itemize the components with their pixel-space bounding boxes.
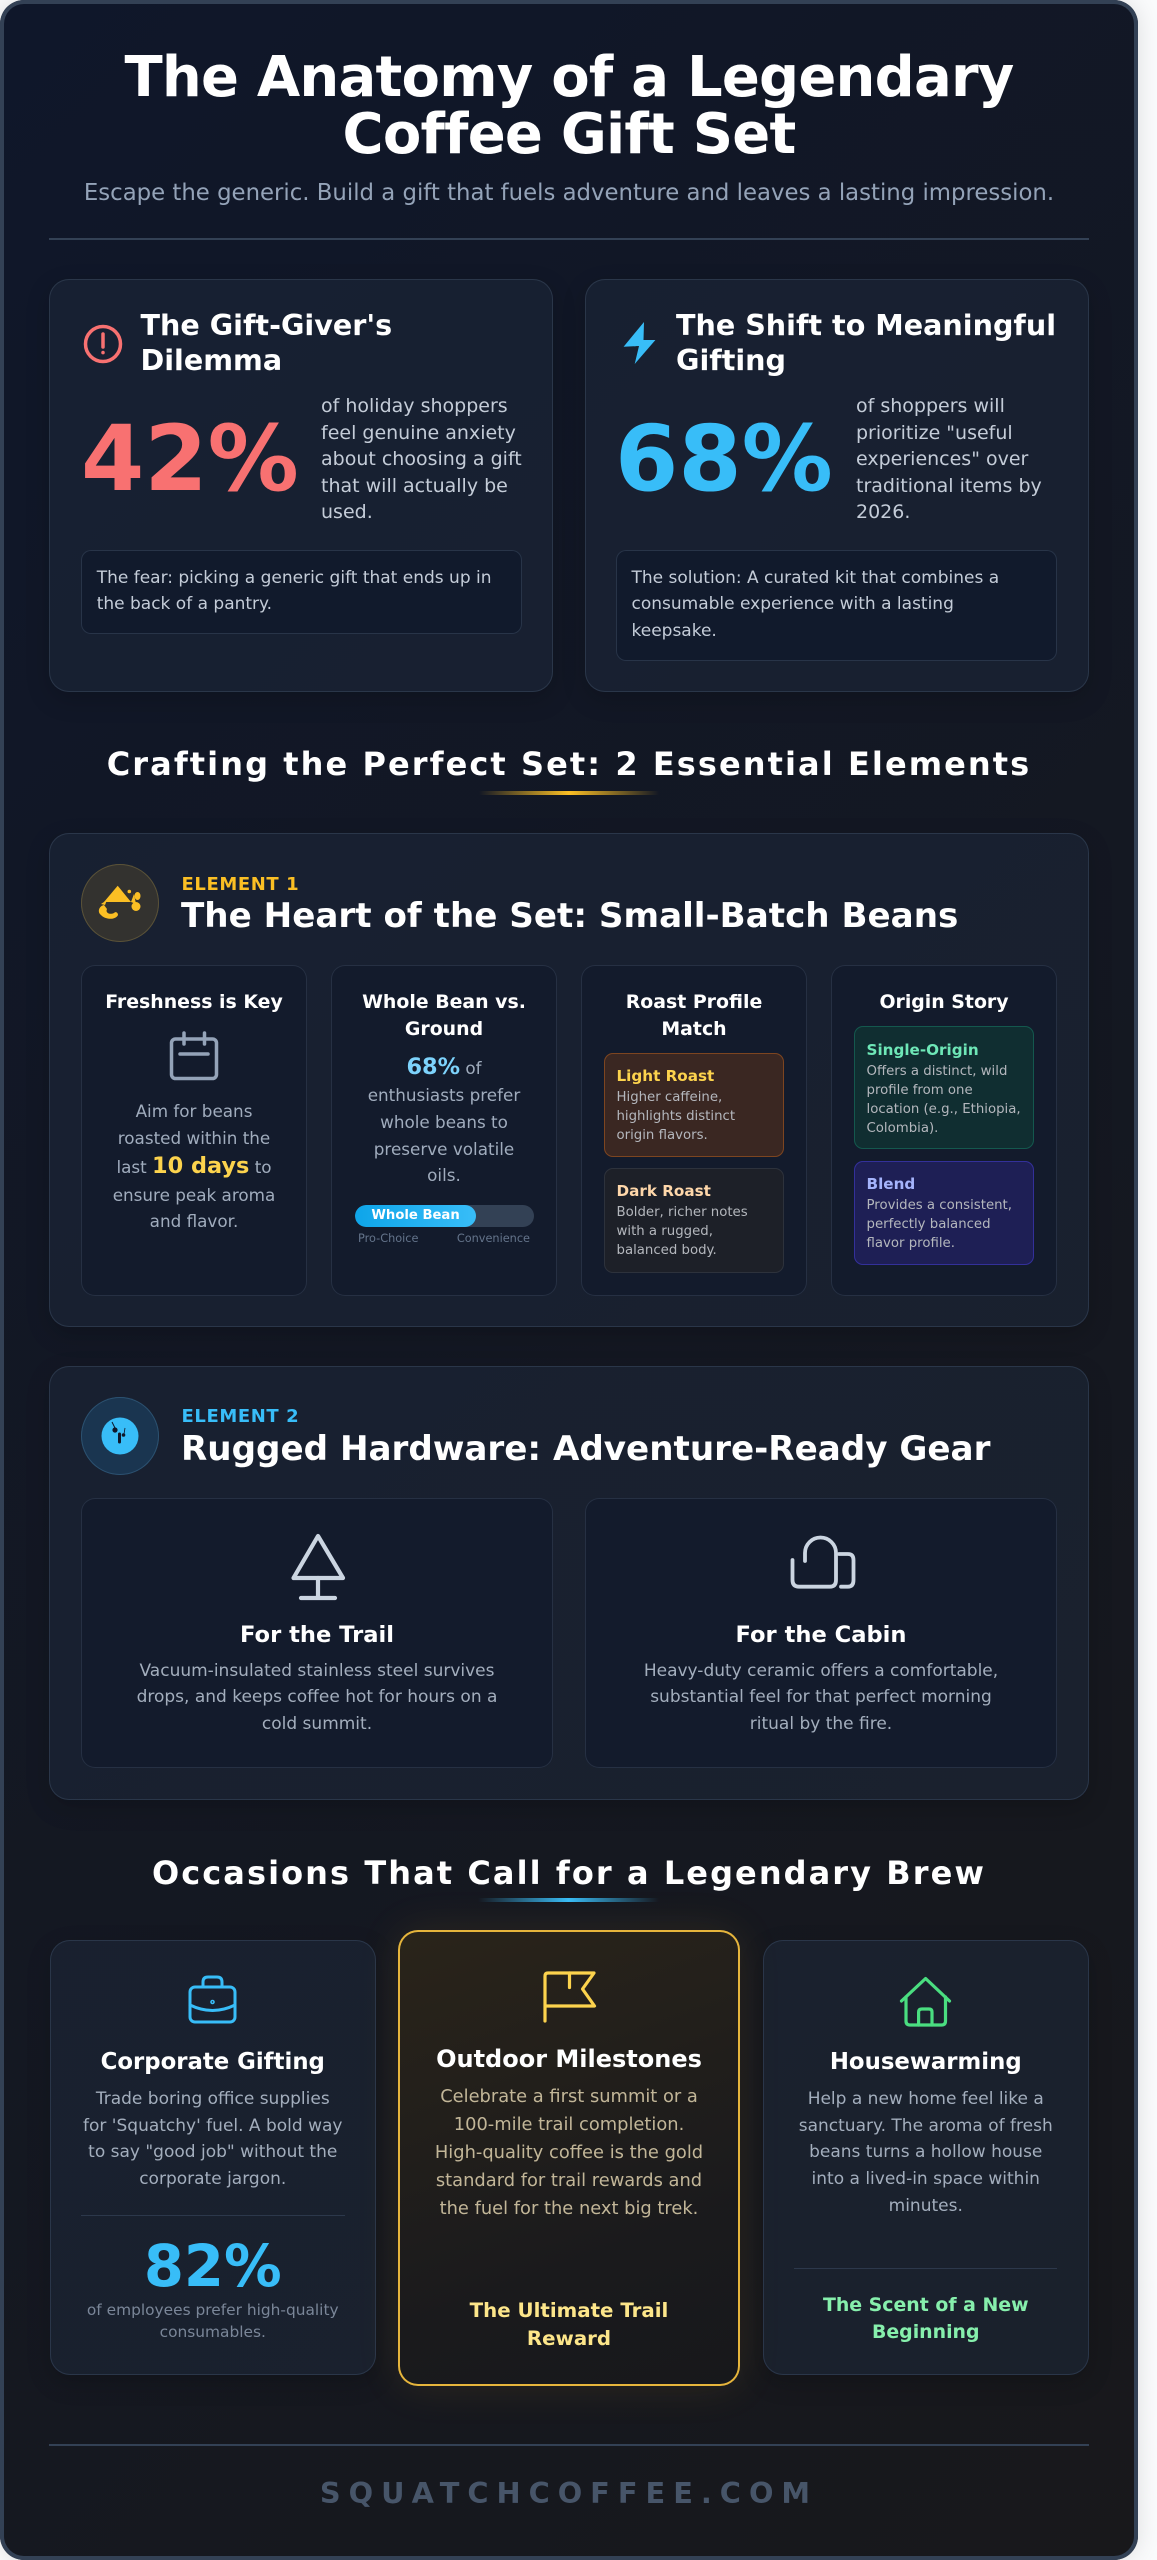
box title: Light Roast: [616, 1067, 714, 1085]
card text: last 10 days to: [116, 1153, 272, 1179]
box text: Provides a consistent,: [866, 1198, 1012, 1213]
heading: The Gift-Giver's: [140, 308, 392, 342]
stat description: feel genuine anxiety: [321, 422, 516, 444]
box: light roast: [604, 1053, 784, 1157]
box text: balanced body.: [616, 1243, 717, 1258]
stat caption: of employees prefer high-quality: [87, 2301, 339, 2319]
stat description: of shoppers will: [856, 395, 1005, 417]
element heading: The Heart of the Set: Small-Batch Beans: [181, 896, 958, 936]
occasion text: [83, 2089, 342, 2189]
callout text: the back of a pantry.: [97, 594, 272, 614]
card text: whole beans to: [380, 1112, 508, 1132]
callout: the solution: [616, 550, 1057, 661]
occasion text: for 'Squatchy' fuel. A bold way: [83, 2116, 342, 2136]
icon badge: bean: [81, 864, 159, 942]
occasion tagline: The Ultimate Trail: [470, 2299, 668, 2322]
box text: with a rugged,: [616, 1224, 713, 1239]
icon: flag: [543, 1971, 596, 2023]
stat description: traditional items by: [856, 475, 1042, 497]
stat description: experiences" over: [856, 448, 1028, 470]
occasion title: Housewarming: [830, 2049, 1022, 2075]
card text: [137, 1661, 497, 1734]
panel: corporate gifting: [50, 1940, 376, 2375]
box text: Bolder, richer notes: [616, 1205, 748, 1220]
title: [124, 45, 1014, 167]
occasion tagline: [470, 2299, 668, 2350]
stat description: about choosing a gift: [321, 448, 522, 470]
box text: location (e.g., Ethiopia,: [866, 1102, 1021, 1117]
box title: Single-Origin: [866, 1041, 979, 1059]
occasion text: beans turns a hollow house: [809, 2142, 1042, 2162]
icon: tree: [291, 1534, 346, 1600]
icon: blue disc with marks: [102, 1418, 138, 1454]
box title: Dark Roast: [616, 1182, 711, 1200]
card title: For the Cabin: [736, 1622, 906, 1648]
box text: [866, 1198, 1012, 1251]
card text: enthusiasts prefer: [368, 1085, 520, 1105]
occasion tagline: Beginning: [872, 2321, 980, 2343]
occasion text: Help a new home feel like a: [808, 2089, 1044, 2109]
occasion tagline: The Scent of a New: [823, 2294, 1029, 2316]
icon: mug: [790, 1536, 856, 1589]
card text: Heavy-duty ceramic offers a comfortable,: [644, 1661, 998, 1681]
heading: Gifting: [676, 343, 786, 377]
occasion text: 100-mile trail completion.: [454, 2114, 684, 2135]
icon: lightning bolt: [624, 322, 656, 364]
card text: [113, 1101, 275, 1231]
occasion text: Trade boring office supplies: [96, 2089, 330, 2109]
section heading: crafting the perfect set: Crafting the Perfect Set: 2 Essential Elements: [107, 745, 1031, 783]
callout text: The fear: picking a generic gift that ends up in: [97, 568, 492, 588]
card text: Vacuum-insulated stainless steel survives: [140, 1661, 494, 1681]
stat description: used.: [321, 501, 373, 523]
card text: ensure peak aroma: [113, 1185, 275, 1205]
box text: flavor profile.: [866, 1236, 955, 1251]
section heading: occasions: Occasions That Call for a Legendary Brew: [152, 1854, 986, 1892]
heading: The Shift to Meaningful: [676, 308, 1056, 342]
card: whole bean vs ground: [331, 965, 557, 1296]
icon: alert circle: [84, 324, 122, 364]
stat caption: [87, 2301, 339, 2341]
stat description: prioritize "useful: [856, 422, 1013, 444]
panel: housewarming: [762, 1940, 1089, 2375]
card text: drops, and keeps coffee hot for hours on a: [137, 1687, 497, 1707]
heading: [676, 308, 1056, 377]
title: Coffee Gift Set: [343, 102, 795, 167]
icon: calendar: [170, 1031, 218, 1080]
card title: Origin Story: [879, 991, 1009, 1013]
card title: [626, 991, 762, 1040]
stat description: that will actually be: [321, 475, 508, 497]
element heading: Rugged Hardware: Adventure-Ready Gear: [181, 1429, 990, 1469]
box: blend: [854, 1161, 1034, 1265]
card text: Aim for beans: [136, 1101, 252, 1121]
heading: [140, 308, 392, 377]
card: for the cabin: [585, 1498, 1057, 1768]
occasion text: [799, 2089, 1053, 2216]
card title: Ground: [405, 1018, 483, 1040]
icon: briefcase: [188, 1976, 237, 2024]
panel: outdoor milestones (featured): [398, 1930, 740, 2386]
stat description: [321, 395, 522, 523]
box: dark roast: [604, 1168, 784, 1273]
stat: 82%: 82%: [144, 2233, 282, 2300]
occasion text: into a lived-in space within: [812, 2169, 1040, 2189]
card text: substantial feel for that perfect morning: [650, 1687, 992, 1707]
progress bar: whole bean share: [355, 1205, 534, 1227]
card text: oils.: [427, 1165, 461, 1185]
stat description: of holiday shoppers: [321, 395, 508, 417]
card title: Roast Profile: [626, 991, 762, 1013]
icon badge: gear: [81, 1397, 159, 1475]
title: The Anatomy of a Legendary: [124, 45, 1014, 110]
element label: ELEMENT 1: [182, 874, 299, 895]
box text: perfectly balanced: [866, 1217, 991, 1232]
heading: Dilemma: [140, 343, 282, 377]
occasion text: Celebrate a first summit or a: [440, 2086, 698, 2107]
box text: [866, 1064, 1021, 1136]
footer: website: SQUATCHCOFFEE.COM: [320, 2476, 818, 2510]
bar label: Whole Bean: [371, 1208, 460, 1223]
panel: the shift to meaningful gifting: [585, 279, 1089, 692]
card: for the trail: [81, 1498, 553, 1768]
element label: ELEMENT 2: [182, 1406, 299, 1427]
occasion tagline: Reward: [527, 2327, 611, 2350]
callout: the fear: [81, 550, 522, 634]
occasion text: to say "good job" without the: [88, 2142, 337, 2162]
occasion text: standard for trail rewards and: [436, 2170, 702, 2191]
card: origin story: [831, 965, 1057, 1296]
occasion title: Corporate Gifting: [101, 2049, 325, 2075]
card text: 68% of: [406, 1054, 482, 1080]
card title: Match: [661, 1018, 727, 1040]
box title: Blend: [866, 1175, 915, 1193]
stat description: [856, 395, 1042, 523]
box text: profile from one: [866, 1083, 973, 1098]
card text: cold summit.: [262, 1714, 372, 1734]
occasion text: corporate jargon.: [139, 2169, 286, 2189]
callout text: [96, 568, 492, 614]
card text: [644, 1661, 998, 1734]
stat caption: consumables.: [160, 2323, 266, 2341]
card text: [368, 1054, 520, 1185]
card: roast profile match: [581, 965, 807, 1296]
box: single-origin: [854, 1026, 1034, 1149]
stat: 42%: 42%: [81, 407, 299, 512]
callout text: [631, 568, 999, 641]
card text: and flavor.: [150, 1211, 238, 1231]
occasion text: minutes.: [889, 2196, 963, 2216]
box text: [616, 1205, 748, 1258]
box text: Offers a distinct, wild: [866, 1064, 1007, 1079]
occasion title: Outdoor Milestones: [436, 2044, 702, 2072]
occasion text: the fuel for the next big trek.: [440, 2198, 698, 2219]
occasion text: High-quality coffee is the gold: [435, 2142, 703, 2163]
subtitle: Escape the generic. Build a gift that fuels adventure and leaves a lasting impression.: [84, 180, 1054, 206]
box text: highlights distinct: [616, 1109, 735, 1124]
occasion tagline: [823, 2294, 1029, 2343]
occasion text: sanctuary. The aroma of fresh: [799, 2116, 1053, 2136]
stat description: 2026.: [856, 501, 910, 523]
card title: For the Trail: [240, 1622, 394, 1648]
icon: bean glyph: [98, 886, 140, 919]
panel: the gift-giver's dilemma: [49, 279, 553, 692]
card title: [362, 991, 526, 1040]
icon: house: [900, 1976, 952, 2027]
card: freshness is key: [81, 965, 307, 1296]
card text: preserve volatile: [374, 1139, 514, 1159]
panel: element 1 small-batch beans: [49, 833, 1089, 1327]
callout text: keepsake.: [632, 621, 717, 641]
callout text: The solution: A curated kit that combines a: [632, 568, 999, 588]
bar axis label: convenience: Convenience: [457, 1232, 530, 1245]
box text: Higher caffeine,: [616, 1090, 722, 1105]
occasion text: [435, 2086, 703, 2219]
card text: roasted within the: [118, 1128, 270, 1148]
stat: 68%: 68%: [615, 407, 833, 512]
card title: Freshness is Key: [105, 991, 283, 1013]
callout text: consumable experience with a lasting: [632, 594, 954, 614]
bar fill: [355, 1205, 476, 1227]
panel: element 2 rugged hardware: [49, 1366, 1089, 1800]
box text: Colombia).: [866, 1121, 938, 1136]
box text: origin flavors.: [616, 1128, 708, 1143]
bar axis label: pro-choice: Pro-Choice: [358, 1232, 418, 1245]
card title: Whole Bean vs.: [362, 991, 526, 1013]
box text: [616, 1090, 735, 1143]
card text: ritual by the fire.: [750, 1714, 892, 1734]
